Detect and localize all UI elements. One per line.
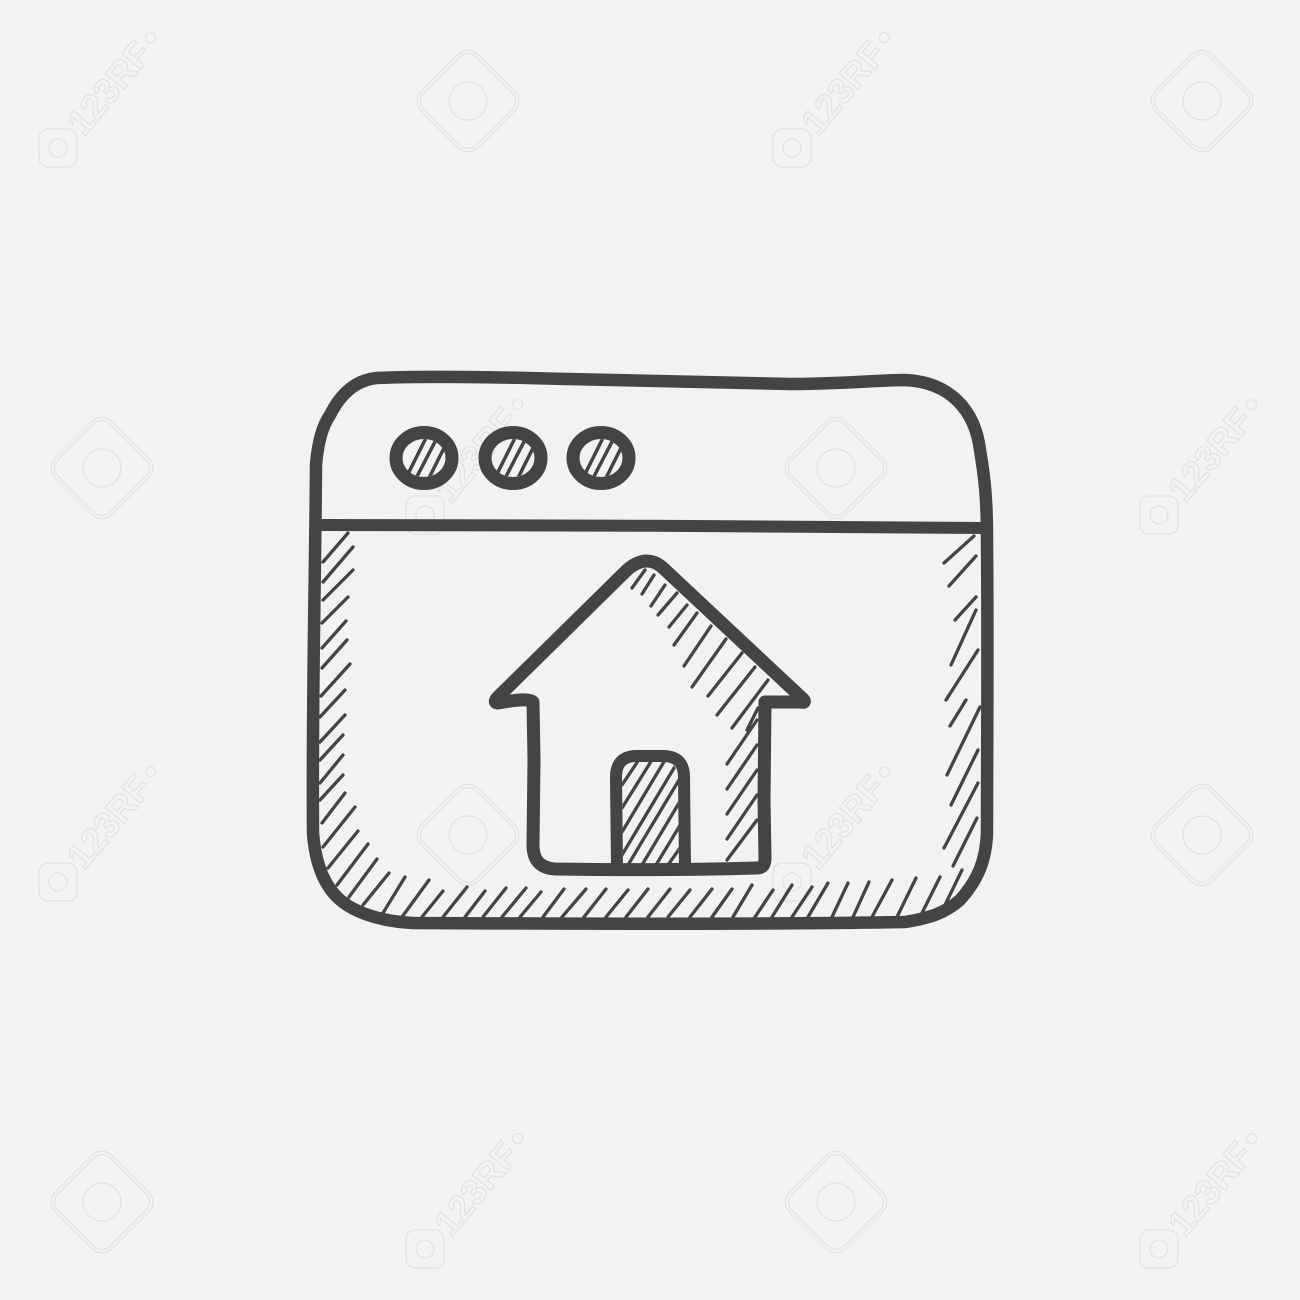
watermark logo bottom centre-left: 123RF — [426, 1134, 527, 1243]
watermark logo lower left: 123RF — [59, 767, 160, 876]
watermark logo lower centre: 123RF — [793, 767, 894, 876]
left side hatching — [320, 533, 358, 868]
right side hatching — [944, 536, 980, 866]
watermark egg top right — [1145, 44, 1259, 158]
watermark egg top centre-left — [411, 44, 525, 158]
watermark logo middle centre-left — [387, 384, 541, 553]
watermark logo bottom right — [1121, 1118, 1275, 1287]
watermark logo bottom right: 123RF — [1160, 1134, 1261, 1243]
watermark egg middle left — [45, 411, 159, 525]
window outline — [313, 377, 987, 924]
watermark logo middle right: 123RF — [1160, 400, 1261, 509]
watermark logo bottom centre-left — [387, 1118, 541, 1287]
icon: browser window with home — [313, 377, 987, 924]
watermark logo lower left — [20, 751, 174, 920]
watermark logo middle centre-left: 123RF — [426, 400, 527, 509]
watermark egg lower right — [1145, 778, 1259, 892]
window control buttons — [396, 432, 629, 490]
house outline — [495, 561, 804, 870]
watermark egg bottom centre — [779, 1145, 893, 1259]
watermark logo top centre — [754, 17, 908, 186]
watermark logo top left: 123RF — [59, 33, 160, 142]
button 2 — [485, 432, 541, 490]
watermark egg lower centre-left — [411, 778, 525, 892]
watermark logo top centre: 123RF — [793, 33, 894, 142]
house shading hatching — [632, 570, 768, 860]
watermark logo middle right — [1121, 384, 1275, 553]
watermark logo top left — [20, 17, 174, 186]
window hatching — [320, 533, 980, 917]
button 1 — [396, 432, 452, 490]
house — [495, 561, 804, 870]
button 3 — [573, 432, 629, 490]
bottom hatching — [337, 844, 962, 917]
watermark egg bottom left — [45, 1145, 159, 1259]
watermark logo lower centre — [754, 751, 908, 920]
door — [616, 755, 685, 868]
header divider — [318, 525, 984, 528]
watermark egg middle centre — [779, 411, 893, 525]
